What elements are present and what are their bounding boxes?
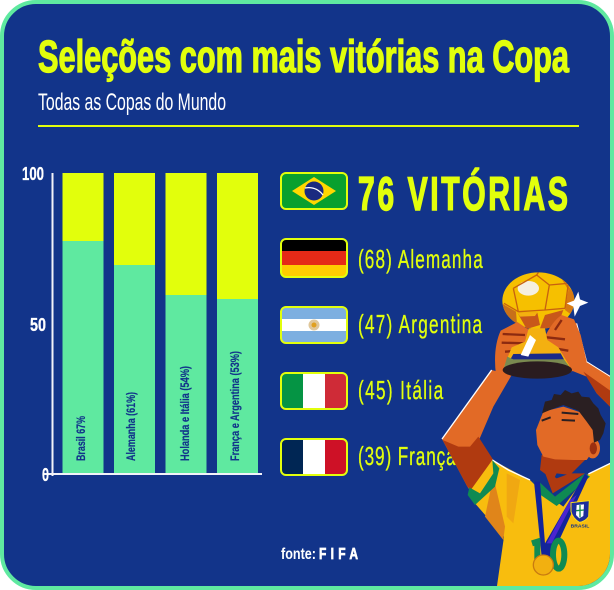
bar label França: França e Argentina (53%) bbox=[228, 351, 242, 461]
crest bbox=[571, 501, 589, 529]
bar label Holanda: Holanda e Itália (54%) bbox=[178, 366, 192, 461]
y label 50: 50 bbox=[30, 315, 46, 335]
label: Alemanha: (68) Alemanha bbox=[358, 244, 483, 274]
subtitle: Todas as Copas do Mundo bbox=[38, 89, 226, 116]
crest: BRASIL bbox=[571, 524, 589, 529]
hands bbox=[495, 315, 587, 375]
number 10 bbox=[532, 541, 564, 570]
illustration: player lifting trophy bbox=[442, 270, 612, 588]
jersey bbox=[468, 460, 612, 588]
bar chart bbox=[22, 164, 262, 485]
bar label Brasil: Brasil 67% bbox=[74, 416, 88, 461]
trophy base bbox=[503, 313, 572, 379]
icon: flag Argentina bbox=[281, 307, 347, 343]
trophy ball bbox=[502, 270, 577, 329]
medal ribbon bbox=[534, 473, 588, 557]
y axis bbox=[52, 173, 54, 476]
label: França: (39) França bbox=[358, 441, 456, 471]
y label 0: 0 bbox=[42, 465, 49, 485]
icon: flag Italy bbox=[281, 373, 348, 409]
bar: Brasil bbox=[62, 173, 104, 473]
bar label Alemanha: Alemanha (61%) bbox=[124, 392, 138, 461]
icon: flag France bbox=[281, 439, 348, 475]
bar: Alemanha bbox=[114, 173, 155, 473]
label: Itália: (45) Itália bbox=[358, 375, 444, 405]
right arm bbox=[572, 322, 610, 407]
source bbox=[281, 544, 358, 563]
heading: 76 vitórias: 76 VITÓRIAS bbox=[358, 168, 568, 221]
bar: Holanda e Itália bbox=[166, 173, 206, 473]
hair bbox=[542, 390, 606, 443]
source: F I F A bbox=[319, 544, 358, 562]
y label 100: 100 bbox=[22, 164, 44, 184]
neck and head bbox=[536, 407, 600, 493]
medal bbox=[533, 555, 553, 575]
label: Argentina: (47) Argentina bbox=[358, 309, 483, 339]
icon: flag Germany bbox=[281, 239, 347, 277]
left arm bbox=[442, 370, 512, 495]
x axis bbox=[44, 473, 262, 475]
sparkle bbox=[567, 292, 588, 317]
source: fonte: bbox=[281, 546, 316, 563]
icon: flag Brazil bbox=[281, 173, 347, 209]
bar: França e Argentina bbox=[217, 173, 258, 473]
